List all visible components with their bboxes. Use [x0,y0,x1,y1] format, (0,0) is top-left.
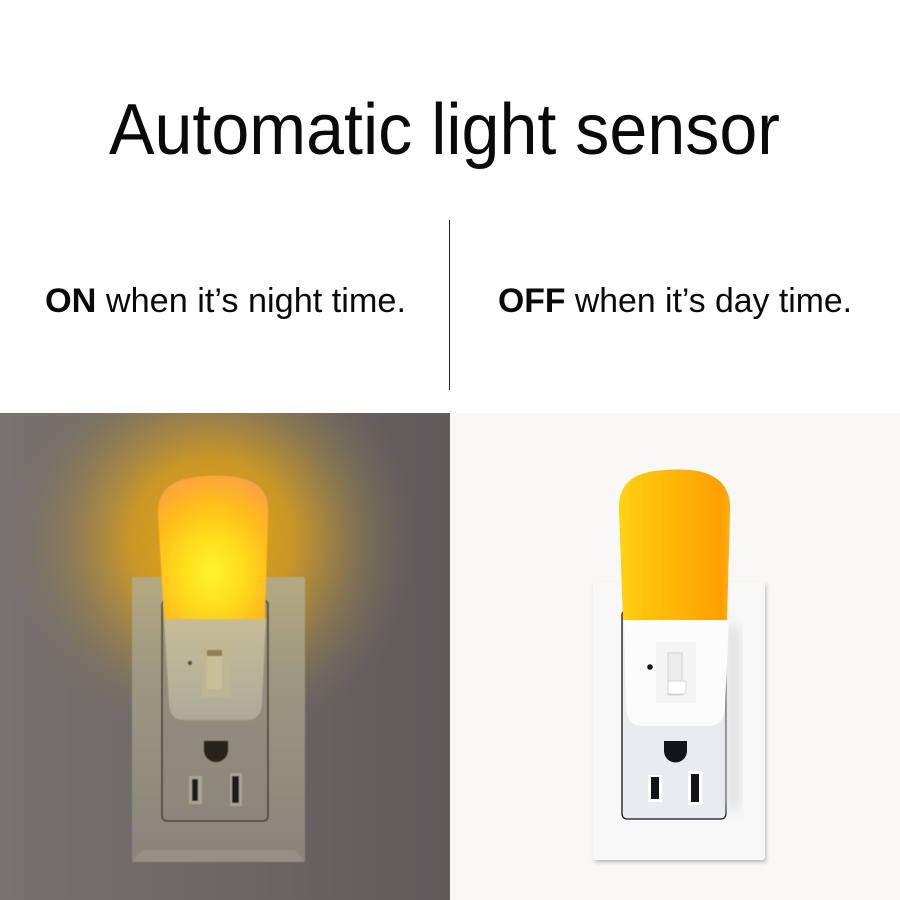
outlet sockets [189,741,242,806]
lamp base [624,618,729,726]
title: Automatic light sensor [109,90,780,170]
panel: day photo [450,413,900,900]
outlet sockets [648,741,702,805]
divider line [449,220,450,390]
amber lamp dome [619,469,730,620]
lamp base [164,618,266,720]
wall plate [593,582,766,862]
lit lamp dome [158,476,268,619]
caption: on at night: ON when it’s night time. [45,282,406,320]
caption: off in day: OFF when it’s day time. [498,282,852,320]
wall plate [132,577,305,862]
panel: night photo [0,413,450,900]
